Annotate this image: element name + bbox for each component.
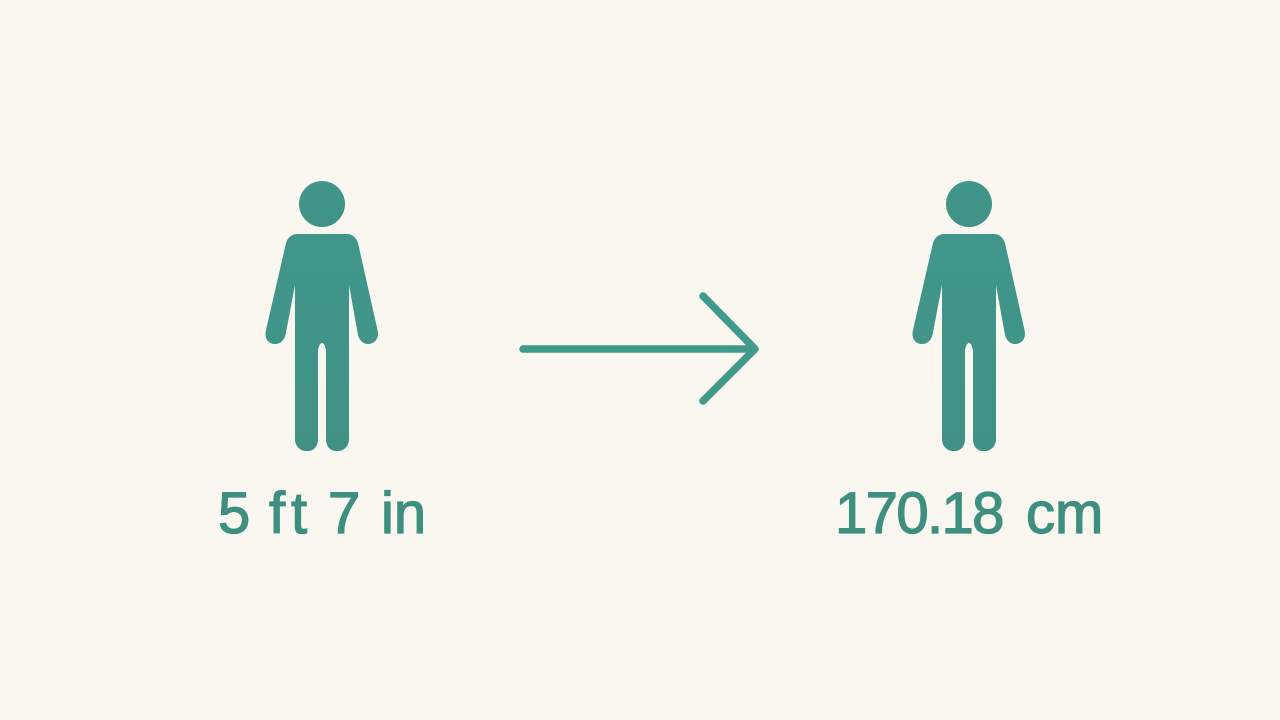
label: 5 ft 7 in: ft xyxy=(269,481,307,546)
arrow xyxy=(523,296,755,401)
icon: person, 170.18 cm xyxy=(912,181,1025,451)
label: 5 ft 7 in: in xyxy=(381,481,426,546)
label: 170.18 cm: cm xyxy=(1026,481,1103,546)
label: 5 ft 7 in: 5 xyxy=(218,481,250,546)
label: 5 ft 7 in: 7 xyxy=(328,481,360,546)
icon: person, 5 ft 7 in xyxy=(265,181,378,451)
label: 170.18 cm: 170.18 xyxy=(835,481,1003,546)
